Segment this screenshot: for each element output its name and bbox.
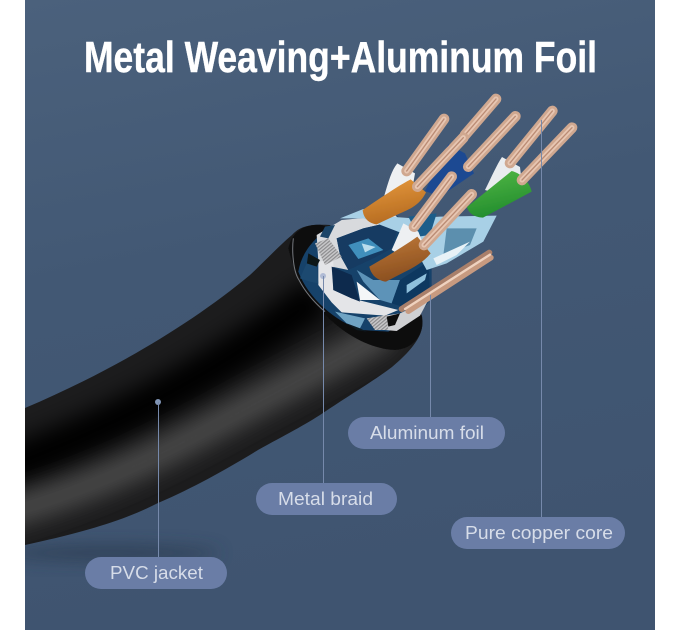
callout: Aluminum foil	[348, 295, 505, 449]
wire: white core, centre	[392, 177, 452, 255]
callout: PVC jacket: PVC jacket	[110, 563, 203, 583]
wires and insulated cores	[340, 99, 572, 311]
wire: blue core	[425, 116, 515, 197]
callout: Aluminum foil: Aluminum foil	[370, 423, 484, 443]
aluminum foil wedge	[340, 209, 497, 270]
callout: Pure copper core	[451, 120, 625, 549]
wire: green core	[467, 128, 572, 218]
metal braid and aluminum foil weave	[298, 215, 432, 332]
wire: orange core	[363, 138, 463, 224]
wire: white core, left	[384, 119, 444, 200]
wire: back copper strand	[465, 99, 496, 135]
callout: PVC jacket	[85, 399, 227, 589]
wire: white core, right	[485, 111, 552, 193]
callout: Pure copper core: Pure copper core	[465, 523, 613, 543]
wire: lower copper strands	[402, 253, 491, 311]
cable shadow	[0, 545, 220, 561]
cable: PVC jacket	[0, 225, 422, 545]
callout: Metal braid: Metal braid	[278, 489, 373, 509]
callout: Metal braid	[256, 273, 397, 515]
wire: brown core	[369, 194, 472, 282]
cable end: jacket cut face	[288, 215, 432, 350]
